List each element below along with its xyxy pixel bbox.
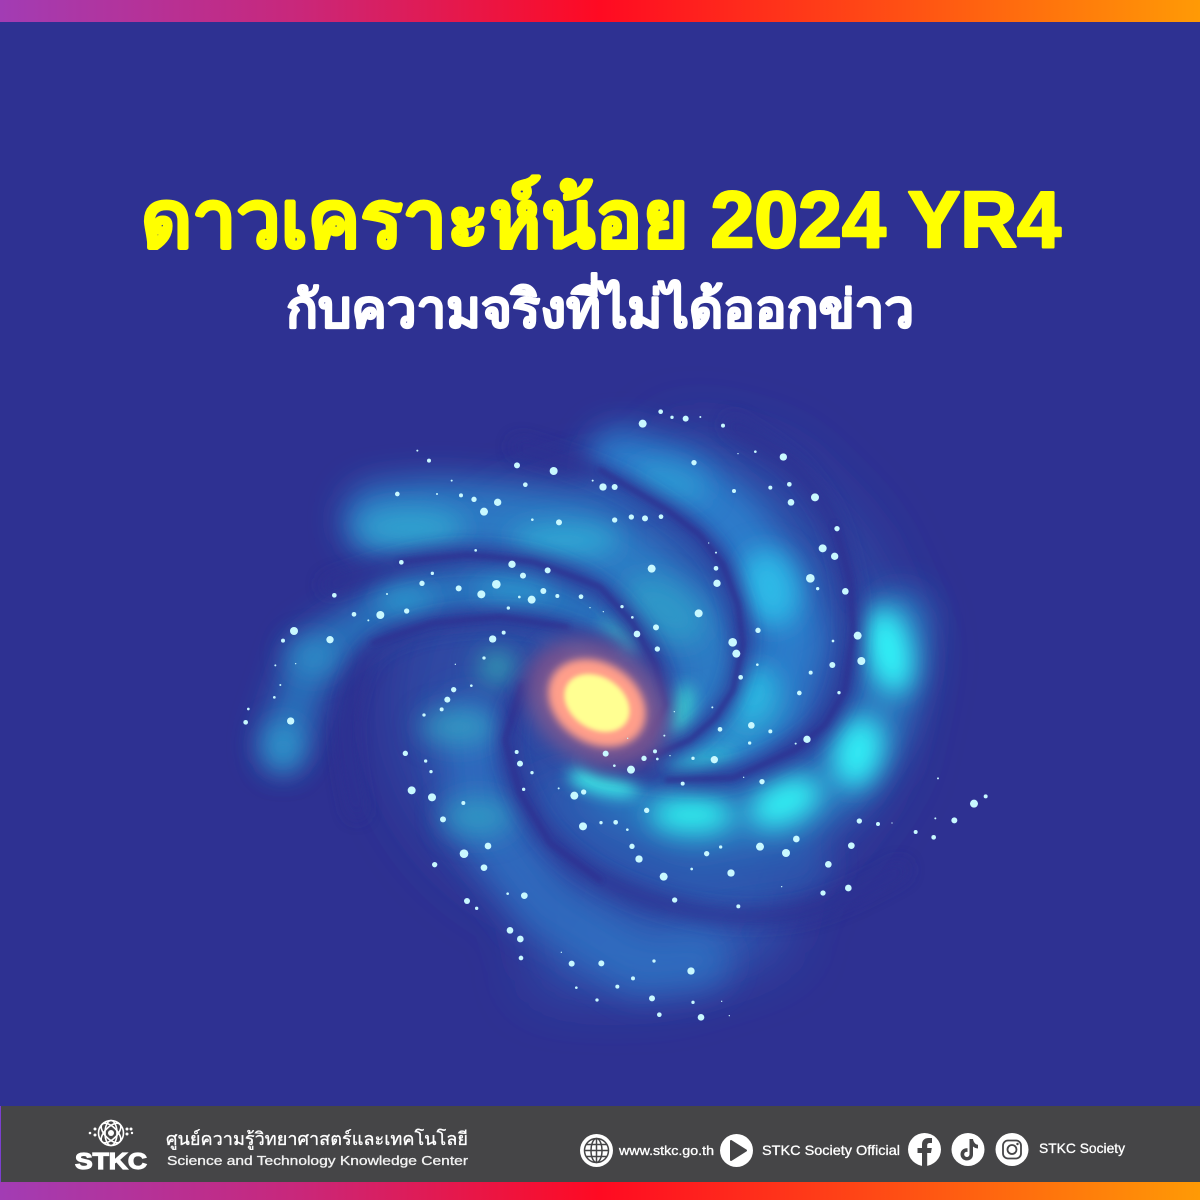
- STKC logo: [75, 1120, 147, 1174]
- galaxy: spiral arms broad blue: [283, 460, 900, 965]
- organisation name Thai: ศูนย์ความรู้วิทยาศาสตร์และเทคโนโลยี: [166, 1128, 468, 1150]
- logo atom mark: [89, 1120, 133, 1146]
- galaxy: inner teal streaks: [566, 615, 737, 800]
- galaxy: dark dust lanes: [373, 470, 853, 880]
- footer gradient bar: [0, 1182, 1200, 1200]
- icon: tiktok: [952, 1133, 984, 1166]
- icon: facebook: [908, 1133, 941, 1166]
- title: ดาวเคราะห์น้อย 2024 YR4: [141, 175, 1062, 264]
- galaxy: stars: [243, 409, 988, 1021]
- footer band: [0, 1106, 1200, 1200]
- spiral galaxy illustration: [243, 409, 988, 1021]
- top gradient bar: [0, 0, 1200, 22]
- icon: website globe: [580, 1134, 613, 1167]
- logo wordmark: STKC: [75, 1148, 147, 1174]
- galaxy: soft dust valleys: [330, 425, 900, 917]
- subtitle: กับความจริงที่ไม่ได้ออกข่าว: [286, 273, 914, 339]
- organisation name English: Science and Technology Knowledge Center: [167, 1153, 469, 1168]
- icon: video play: [720, 1134, 753, 1167]
- galaxy: core: [502, 613, 692, 793]
- icon: instagram: [996, 1133, 1028, 1166]
- video channel name: STKC Society Official: [762, 1142, 900, 1158]
- website url: www.stkc.go.th: [618, 1143, 714, 1158]
- galaxy: bright clumps: [263, 454, 920, 838]
- social account name: STKC Society: [1039, 1140, 1125, 1156]
- galaxy: outer glow: [390, 460, 890, 960]
